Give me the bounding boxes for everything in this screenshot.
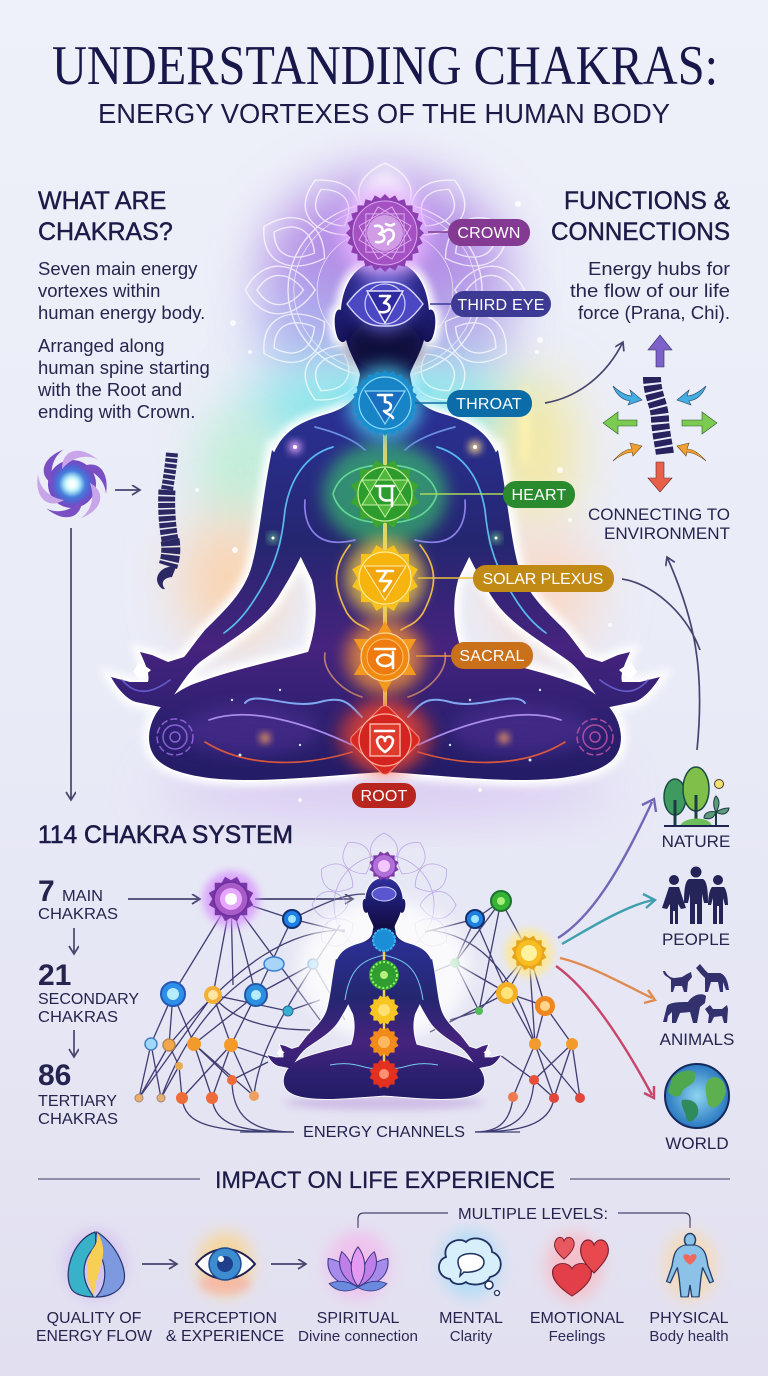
stat: 7 main chakras: CHAKRAS: [38, 906, 118, 923]
labels: bottom row: PERCEPTION: [173, 1310, 277, 1327]
text block: arrangement: Arranged along: [38, 335, 165, 356]
heading: functions and connections: FUNCTIONS &: [564, 187, 730, 215]
chakra: third eye: [347, 276, 423, 332]
small mandala: [312, 833, 456, 955]
icon: animals: [663, 964, 729, 1023]
arrow orange left: [613, 443, 642, 461]
heading: 114 chakra system: 114 CHAKRA SYSTEM: [38, 821, 293, 849]
heading: impact on life experience: IMPACT ON LIFE EXPERIENCE: [215, 1167, 555, 1194]
text block: definition: human energy body.: [38, 302, 205, 323]
icon: spine: [157, 453, 176, 589]
label: sacral: SACRAL: [459, 648, 525, 665]
subtitle: ENERGY VORTEXES OF THE HUMAN BODY: [98, 98, 670, 129]
labels: bottom row: Divine connection: [298, 1328, 418, 1345]
icon: world: [665, 1064, 729, 1128]
label: root: ROOT: [360, 788, 408, 805]
hand gaps: [133, 662, 151, 680]
chakra nodes: right: [450, 891, 585, 1103]
text: world: WORLD: [665, 1134, 729, 1153]
text block: energy hubs: the flow of our life: [570, 280, 730, 301]
arrow down: [648, 462, 672, 492]
label: third eye: [430, 291, 551, 317]
text: nature: NATURE: [662, 832, 730, 851]
text block: arrangement: with the Root and: [37, 379, 182, 400]
text: connecting to environment: CONNECTING TO: [588, 505, 730, 524]
stat: 86 tertiary chakras: 86: [38, 1059, 71, 1092]
text block: arrangement: human spine starting: [38, 357, 210, 378]
icon: people: [662, 866, 728, 924]
icon: spiritual lotus: [326, 1231, 390, 1299]
stat: 7 main chakras: 7: [38, 875, 55, 908]
multiple levels bracket: MULTIPLE LEVELS:: [458, 1206, 608, 1223]
text: animals: ANIMALS: [660, 1030, 734, 1049]
arrow: down to 114 chakra system: [70, 528, 72, 800]
arrow right: [682, 412, 717, 434]
icon: spiral vortex: [37, 444, 107, 524]
stat: 21 secondary chakras: CHAKRAS: [38, 1009, 118, 1026]
arrow: spiral to spine: [115, 489, 140, 491]
labels: bottom row: QUALITY OF: [47, 1310, 142, 1327]
icon: spine with radiating arrows: [603, 335, 717, 492]
text: energy channels: ENERGY CHANNELS: [303, 1124, 465, 1141]
label: heart: HEART: [512, 487, 566, 504]
sparkles: [195, 201, 612, 802]
stat: 86 tertiary chakras: CHAKRAS: [38, 1111, 118, 1128]
labels: bottom row: & EXPERIENCE: [166, 1328, 284, 1345]
labels: bottom row: EMOTIONAL: [530, 1310, 624, 1327]
arrow: flow to perception: [142, 1263, 177, 1265]
label: crown: [428, 219, 530, 246]
stat: 86 tertiary chakras: TERTIARY: [38, 1093, 117, 1110]
labels: bottom row: PHYSICAL: [649, 1310, 729, 1327]
labels: bottom row: [36, 1310, 729, 1345]
icon: nature: [664, 767, 729, 826]
labels: bottom row: MENTAL: [439, 1310, 503, 1327]
panel: functions and connections: [551, 187, 730, 323]
labels: bottom row: ENERGY FLOW: [36, 1328, 153, 1345]
text block: energy hubs: force (Prana, Chi).: [578, 302, 730, 323]
icon: emotional hearts: [546, 1232, 608, 1300]
text block: definition: vortexes within: [38, 280, 160, 301]
label: crown: CROWN: [457, 225, 521, 242]
heading: what are chakras: CHAKRAS?: [38, 218, 173, 246]
label: root: [352, 783, 416, 808]
arrow blue right: [677, 386, 706, 405]
labels: bottom row: Feelings: [549, 1328, 605, 1345]
panel: what are chakras: [37, 187, 210, 422]
stat: 7 main chakras: MAIN: [62, 888, 103, 905]
stat: 21 secondary chakras: 21: [38, 959, 71, 992]
text block: definition: Seven main energy: [38, 258, 198, 279]
chakra: root: [348, 702, 422, 777]
heading: functions and connections: CONNECTIONS: [551, 218, 730, 246]
chakra nodes: left: [135, 871, 318, 1104]
icon: quality of energy flow: [65, 1231, 125, 1299]
chakra: crown: [339, 187, 431, 279]
arrow: 21 to 86: [73, 1030, 75, 1057]
mandala behind head: [245, 163, 525, 417]
chakra: heart: [351, 460, 419, 528]
label: solar plexus: [418, 565, 614, 592]
text: connecting to environment: ENVIRONMENT: [604, 524, 730, 543]
label: heart: [420, 481, 575, 508]
label: solar plexus: SOLAR PLEXUS: [482, 571, 604, 588]
chakra: sacral: [349, 621, 421, 693]
icon: physical body: [665, 1232, 715, 1300]
heading: what are chakras: WHAT ARE: [38, 187, 166, 215]
arrow: throat to functions: [545, 342, 623, 403]
meditating figure: [111, 260, 660, 780]
arrow: 7 main to node: [128, 898, 200, 900]
icon: mental cloud: [439, 1230, 501, 1298]
icon: perception eye: [196, 1232, 255, 1296]
stat: 21 secondary chakras: SECONDARY: [38, 991, 139, 1008]
labels: bottom row: Clarity: [450, 1328, 493, 1345]
small chakras: [369, 852, 399, 1088]
text block: energy hubs: Energy hubs for: [588, 258, 730, 279]
labels: bottom row: SPIRITUAL: [317, 1310, 399, 1327]
arrow: curves to environment: [622, 557, 700, 750]
arrow: perception to spiritual: [271, 1263, 306, 1265]
label: third eye: THIRD EYE: [457, 297, 545, 314]
arrow: 7 to 21: [73, 928, 75, 954]
central glow: [155, 170, 615, 816]
label: sacral: [416, 642, 533, 669]
arrow: node to small figure: [255, 898, 353, 900]
label: throat: THROAT: [456, 396, 522, 413]
arrow up: [648, 335, 672, 367]
labels: bottom row: Body health: [649, 1328, 729, 1345]
arrow left: [603, 412, 637, 434]
small meditating figure: [268, 878, 501, 1110]
text block: arrangement: ending with Crown.: [38, 401, 195, 422]
arrow blue left: [613, 386, 642, 405]
panel: 114 chakra system: [38, 821, 353, 1128]
radiating connection arrows: [556, 799, 656, 1098]
energy channel network: [139, 894, 580, 1132]
multiple levels bracket: [358, 1206, 690, 1228]
text: people: PEOPLE: [662, 930, 730, 949]
label: throat: [415, 390, 532, 417]
chakra: solar plexus: [347, 540, 423, 616]
arrow orange right: [677, 443, 706, 461]
chakra: throat: [346, 364, 424, 442]
